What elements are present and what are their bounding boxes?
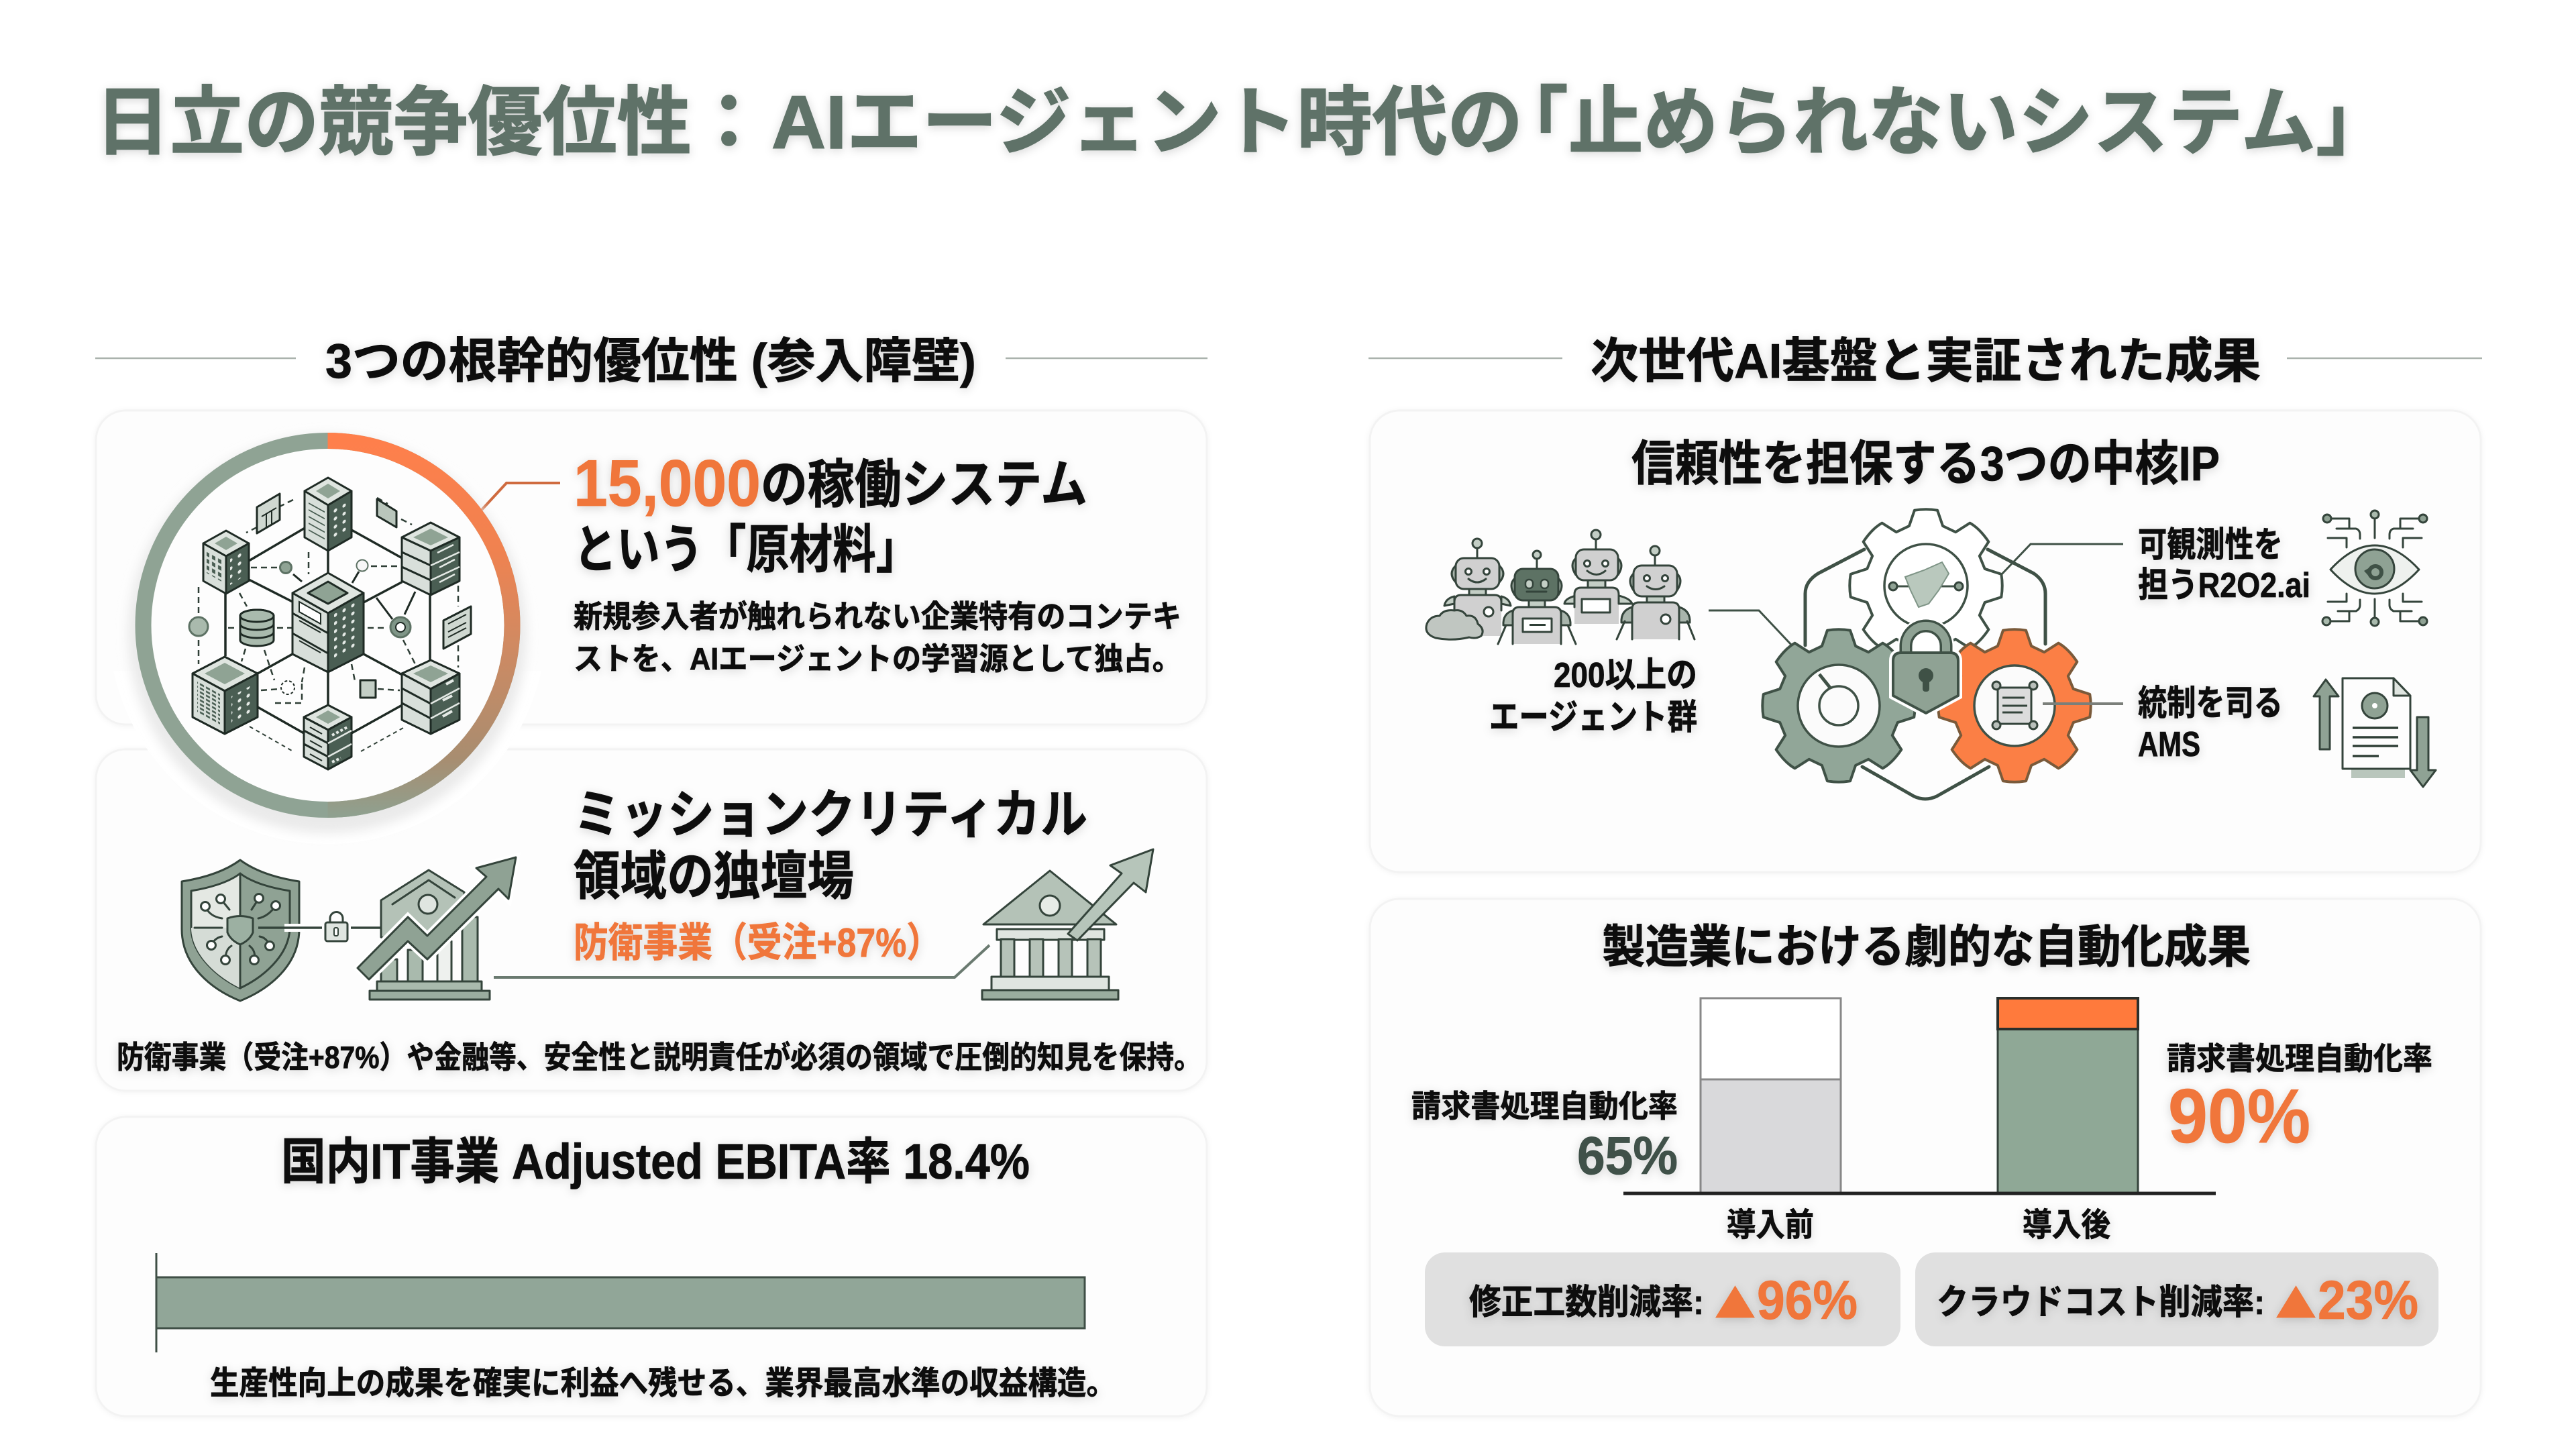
description: ストを、AIエージェントの学習源として独占。 [574,641,1181,676]
progress ring [144,441,513,810]
title: 日立の競争優位性： [95,80,766,164]
panel: mission critical [96,749,1207,1091]
server tower: top right [402,523,460,595]
server tower: bottom right [402,660,460,734]
stat pill: cloud cost reduction: 23% [2318,1270,2418,1331]
label: agents: エージェント群 [1489,698,1697,737]
value label: before [1411,1089,1678,1185]
label: R2O2.ai [2138,526,2310,605]
label: R2O2.ai: 担うR2O2.ai [2138,566,2310,605]
heading: 信頼性を担保する3つの中核IP [1631,437,2220,491]
stat pill: rework reduction: 96% [1757,1270,1858,1331]
headline [574,446,1087,579]
server tower: top left [203,531,249,594]
heading: 製造業における劇的な自動化成果 [1602,922,2251,973]
robot 1 [1444,539,1511,636]
value label: before: 請求書処理自動化率 [1411,1089,1678,1124]
robot 4 [1617,546,1695,639]
label: AMS: AMS [2138,725,2200,764]
chart: before bar [1701,998,1841,1193]
stat pill: rework reduction [1425,1252,1900,1346]
icon: database [240,610,274,646]
icon: eye [2322,511,2427,626]
value label: after [2167,1041,2432,1159]
headline: の稼働システム [761,455,1087,514]
value label: after: 90% [2168,1074,2310,1159]
headline: 15,000 [574,446,761,520]
value label: after: 請求書処理自動化率 [2167,1041,2432,1076]
robot 2 [1498,551,1576,644]
label: AMS: 統制を司る [2138,684,2283,723]
icon: bank with arrow [982,849,1153,1000]
title [95,80,2391,164]
stat pill: rework reduction: 修正工数削減率: [1469,1283,1704,1322]
axis label: after: 導入後 [2023,1208,2110,1243]
stat pill: rework reduction: ▲ [1703,1269,1768,1329]
connector lines [1709,544,2123,799]
description [574,599,1181,676]
icon: robots [1426,530,1695,644]
panel: EBITA [96,1117,1207,1416]
headline [574,785,1087,906]
label: AMS [2138,684,2283,764]
panel: manufacturing results [1370,899,2481,1416]
icon: padlock [1893,626,1958,713]
stat pill: cloud cost reduction: クラウドコスト削減率: [1937,1283,2265,1322]
server tower: centre [292,573,364,672]
headline: ミッションクリティカル [574,785,1087,844]
label: R2O2.ai: 可観測性を [2138,526,2283,565]
label: agents [1489,656,1697,737]
robot 3 [1564,530,1632,624]
icon: rising building [358,857,516,1000]
headline: 領域の独壇場 [574,847,854,906]
icon: shield [182,860,305,1001]
description: 新規参入者が触れられない企業特有のコンテキ [574,599,1181,634]
stat pill: cloud cost reduction [1915,1252,2438,1346]
axis label: before: 導入前 [1727,1208,1814,1243]
value label: before: 65% [1577,1126,1678,1185]
callout line [482,483,560,510]
cloud [1426,610,1483,639]
description: 防衛事業（受注+87%）や金融等、安全性と説明責任が必須の領域で圧倒的知見を保持。 [117,1040,1201,1075]
icon: small lock link [258,912,380,941]
panel: 15,000 systems [96,411,1207,724]
illustration: server network in ring [127,433,527,833]
connector line [494,945,989,977]
server tower: bottom [304,705,352,769]
chart axis [1623,1191,2216,1195]
heading: 国内IT事業 Adjusted EBITA率 18.4% [281,1134,1030,1189]
title: AIエージェント時代の [771,80,1523,164]
small node icons [189,494,471,698]
orange subheading: 防衛事業（受注+87%） [574,920,941,965]
section heading: right: 次世代AI基盤と実証された成果 [1591,335,2261,388]
description: 生産性向上の成果を確実に利益へ残せる、業界最高水準の収益構造。 [210,1366,1116,1401]
bar chart [156,1253,1085,1352]
icon: top gear [1849,509,2002,662]
headline: という「原材料」 [574,520,919,579]
icon: orange gear [1938,629,2123,782]
panel: core IP [1370,411,2481,872]
label: agents: 200以上の [1554,656,1697,695]
server tower: bottom left [193,657,258,734]
server tower: top [305,478,352,551]
icon: document with arrows [2314,678,2436,787]
stat pill: cloud cost reduction: ▲ [2263,1269,2328,1329]
network lines [199,498,458,751]
section heading: left: 3つの根幹的優位性 (参入障壁) [325,335,976,388]
icon: green gear [1762,629,1915,782]
chart: after bar [1998,998,2138,1193]
title: 「止められないシステム」 [1493,80,2391,164]
